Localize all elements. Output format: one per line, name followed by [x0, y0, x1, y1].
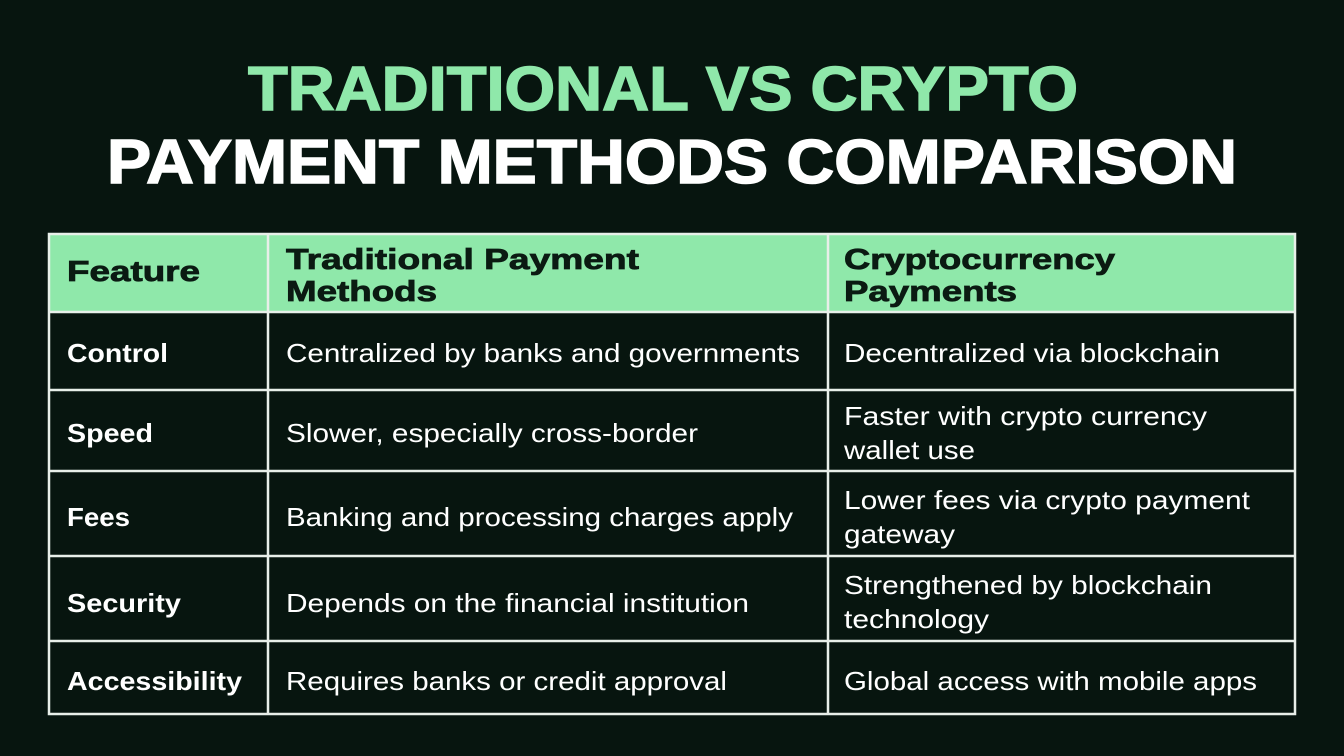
traditional column: Slower, especially cross-border	[286, 418, 698, 448]
header row	[49, 234, 1295, 312]
row labels: Speed	[67, 418, 153, 448]
crypto column: technology	[844, 604, 989, 634]
crypto column: Decentralized via blockchain	[844, 338, 1220, 368]
crypto column: Faster with crypto currency	[844, 401, 1207, 431]
traditional column: Depends on the financial institution	[286, 588, 749, 618]
row labels: Accessibility	[67, 666, 243, 696]
traditional column: Centralized by banks and governments	[286, 338, 800, 368]
table grid	[49, 234, 1295, 714]
title: PAYMENT METHODS COMPARISON	[107, 128, 1237, 197]
table	[49, 234, 1295, 714]
crypto column: Strengthened by blockchain	[844, 570, 1212, 600]
header row: Methods	[286, 276, 437, 308]
header row: Payments	[844, 276, 1017, 308]
header row: Cryptocurrency	[844, 244, 1115, 276]
title: TRADITIONAL VS CRYPTO	[248, 55, 1078, 124]
crypto column: Global access with mobile apps	[844, 666, 1257, 696]
header row: Feature	[67, 256, 200, 288]
row labels: Security	[67, 588, 182, 618]
title	[107, 55, 1237, 197]
header row: Traditional Payment	[286, 244, 639, 276]
traditional column	[286, 338, 800, 696]
row labels: Control	[67, 338, 168, 368]
crypto column	[843, 338, 1257, 696]
traditional column: Banking and processing charges apply	[286, 502, 793, 532]
crypto column: wallet use	[843, 435, 975, 465]
crypto column: gateway	[844, 519, 955, 549]
crypto column: Lower fees via crypto payment	[844, 485, 1251, 515]
row labels	[67, 338, 243, 696]
row labels: Fees	[67, 502, 130, 532]
traditional column: Requires banks or credit approval	[286, 666, 727, 696]
